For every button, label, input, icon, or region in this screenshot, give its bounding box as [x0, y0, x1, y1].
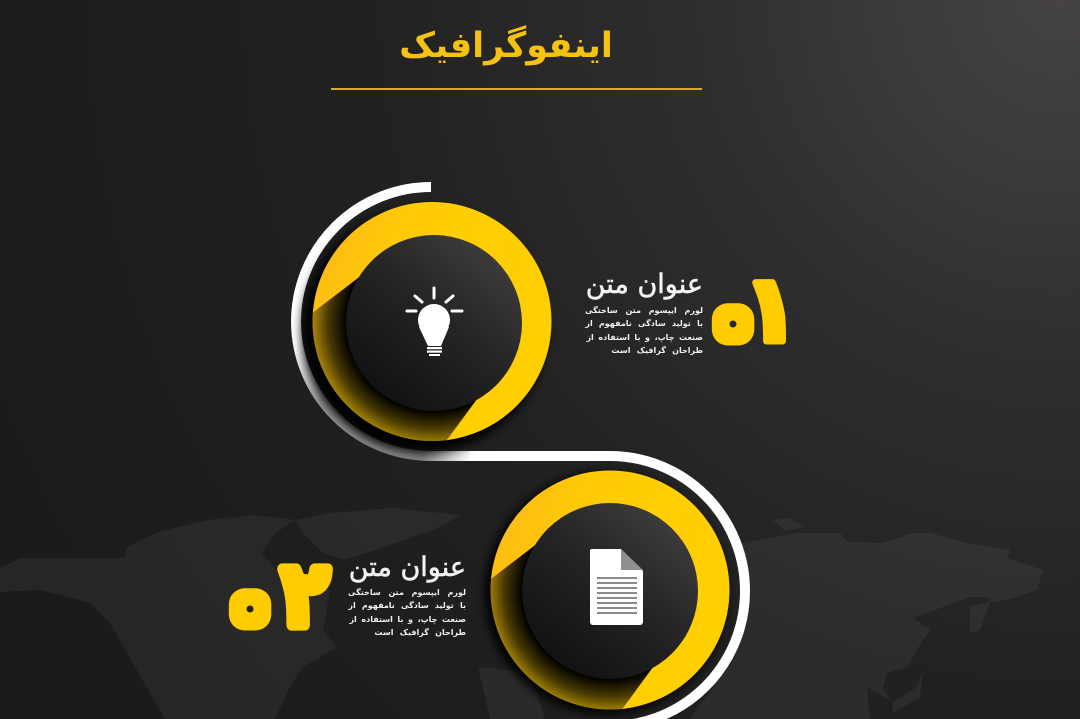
step 1 number: ۰	[715, 286, 751, 356]
world map	[0, 508, 1043, 719]
icon: document	[590, 549, 643, 625]
step 2 number: ۰	[232, 571, 268, 641]
step 2 body text	[347, 587, 466, 637]
step 1 number: ۱	[743, 256, 799, 363]
step 1 circle	[290, 202, 552, 480]
step 2 circle	[466, 470, 730, 719]
step 1 body text: طراحان گرافیک است	[611, 345, 703, 355]
connector ribbon	[296, 187, 750, 719]
step 2 number: ۲	[281, 543, 329, 646]
step 1 number	[715, 256, 799, 363]
long shadow 1	[312, 277, 476, 441]
dark disc 2	[522, 503, 698, 679]
step 2 body text: صنعت چاپ، و با استفاده از	[348, 615, 466, 624]
step 1 body text: صنعت چاپ، و با استفاده از	[585, 333, 703, 342]
step 1 heading: عنوان متن	[586, 269, 703, 300]
title underline	[331, 88, 702, 90]
title: اینفوگرافیک	[399, 25, 613, 66]
long shadow 2	[490, 545, 652, 710]
step 1 body text	[584, 305, 703, 355]
step 2 number	[232, 543, 329, 646]
step 2 heading: عنوان متن	[349, 552, 466, 583]
step 2 body text: لورم ایپسوم متن ساختگی	[348, 587, 466, 597]
step 1 body text: با تولید سادگی نامفهوم از	[584, 318, 703, 328]
step 2 body text: با تولید سادگی نامفهوم از	[347, 600, 466, 610]
icon: light bulb	[407, 288, 462, 356]
step 2 body text: طراحان گرافیک است	[374, 627, 466, 637]
dark disc 1	[346, 235, 522, 411]
step 1 body text: لورم ایپسوم متن ساختگی	[585, 305, 703, 315]
